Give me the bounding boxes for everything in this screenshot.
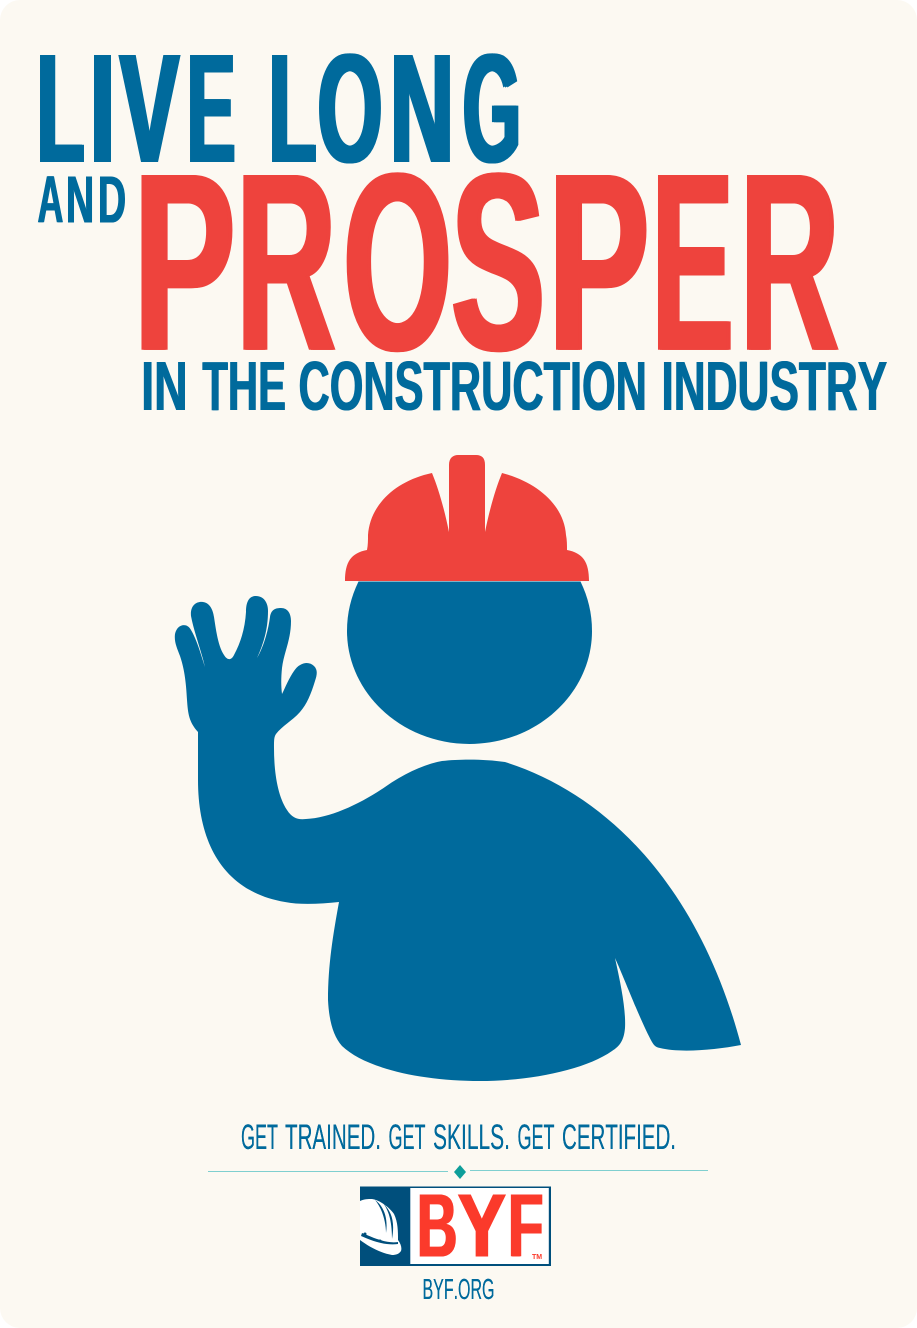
heading: in the construction industry: INDUSTRY — [661, 348, 887, 426]
heading: in the construction industry — [141, 346, 887, 426]
heading: and: N — [65, 163, 94, 237]
BYF logo — [360, 1175, 551, 1276]
heading: prosper: S — [449, 120, 543, 404]
tagline — [241, 1118, 676, 1157]
heading: live long: V — [118, 21, 177, 195]
divider with diamond — [208, 1165, 708, 1179]
tagline: SKILLS. — [433, 1118, 510, 1157]
heading: live long: I — [88, 21, 113, 195]
logo wordmark — [416, 1175, 542, 1276]
heading: prosper: O — [341, 120, 450, 404]
tagline: GET — [388, 1118, 426, 1157]
icon: head — [347, 582, 592, 744]
logo wordmark: Y — [456, 1177, 505, 1276]
heading: in the construction industry: THE — [202, 348, 286, 426]
title — [35, 21, 887, 426]
heading: live long: L — [267, 23, 314, 196]
heading: prosper: P — [131, 121, 234, 404]
tagline: GET — [518, 1118, 554, 1157]
heading: live long: G — [461, 22, 519, 195]
heading: in the construction industry: IN — [141, 346, 187, 425]
heading: live long — [35, 21, 519, 196]
heading: in the construction industry: CONSTRUCTION — [298, 347, 646, 426]
heading: and: D — [97, 163, 126, 237]
trademark: TM — [532, 1254, 542, 1261]
heading: prosper — [131, 120, 838, 404]
tagline: GET — [241, 1118, 278, 1157]
heading: live long: L — [35, 23, 82, 196]
heading: and — [37, 163, 126, 238]
heading: and: A — [37, 164, 63, 238]
tagline: CERTIFIED. — [562, 1118, 676, 1157]
heading: prosper: E — [650, 122, 731, 404]
heading: prosper: P — [546, 121, 648, 404]
heading: live long: O — [316, 22, 380, 196]
icon: body with raised hand — [175, 596, 741, 1081]
heading: live long: N — [388, 22, 452, 195]
heading: prosper: R — [234, 121, 334, 404]
icon: hard hat — [345, 455, 589, 581]
tagline: TRAINED. — [285, 1118, 381, 1157]
logo wordmark: F — [507, 1176, 542, 1276]
heading: live long: E — [185, 21, 233, 195]
icon: logo helmet — [360, 1199, 401, 1255]
website: BYF.ORG — [422, 1274, 494, 1306]
logo wordmark: B — [416, 1175, 456, 1276]
heading: prosper: R — [738, 121, 838, 404]
worker figure — [175, 455, 741, 1081]
